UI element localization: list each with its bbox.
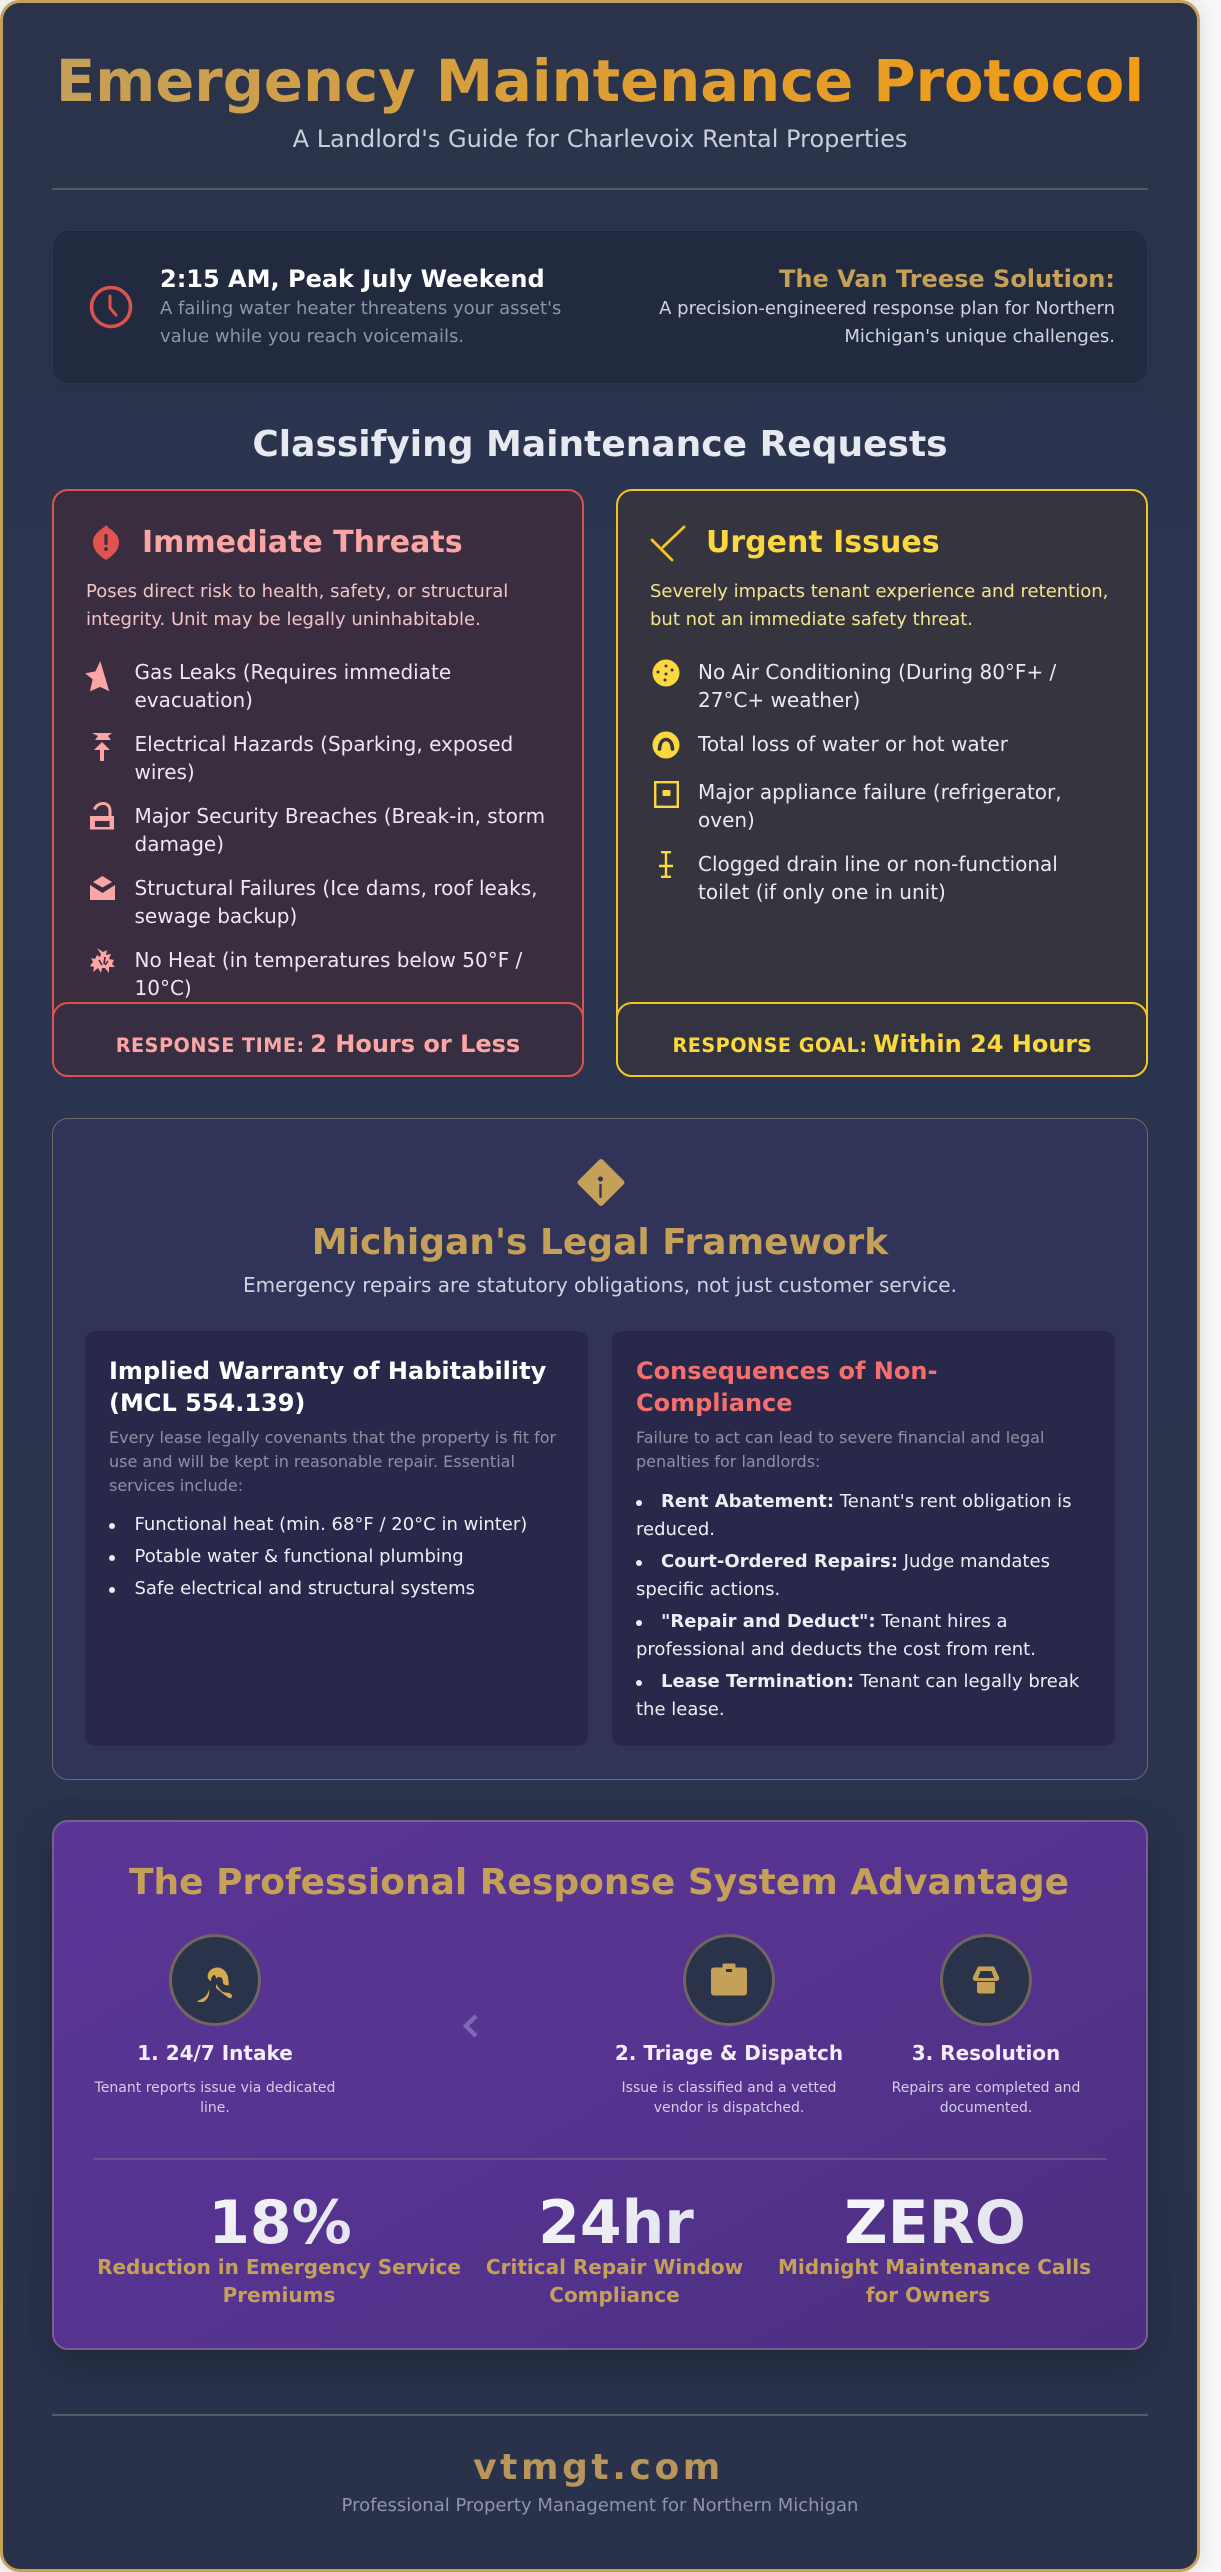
panel: scenario and solution banner — [52, 230, 1148, 384]
warranty description: services include: — [109, 1476, 243, 1495]
item: no heat: 10°C) — [134, 976, 192, 1000]
item: no air conditioning: 27°C+ weather) — [698, 688, 860, 712]
consequences description: Failure to act can lead to severe financial and legal — [636, 1428, 1044, 1447]
step description — [594, 2078, 864, 2118]
panel description — [86, 581, 508, 630]
item: electrical hazards: Electrical Hazards (Sparking, exposed — [134, 732, 513, 756]
warranty heading — [109, 1357, 546, 1417]
item: structural failures — [90, 876, 537, 928]
footer — [0, 2440, 1200, 2530]
stat label: for Owners — [866, 2283, 990, 2307]
step label: 1. 24/7 Intake — [137, 2041, 293, 2065]
list: consequences: Court-Ordered Repairs: Judge mandates — [661, 1551, 1050, 1572]
item: appliance failure: oven) — [698, 808, 755, 832]
panel: consequences — [612, 1331, 1115, 1746]
item: clogged drain: Clogged drain line or non-functional — [698, 852, 1058, 876]
icon: drain — [659, 851, 673, 878]
response time bar: immediate — [52, 1002, 584, 1077]
scenario description — [160, 298, 561, 347]
icon: info diamond — [578, 1159, 624, 1206]
panel: implied warranty — [85, 1331, 588, 1746]
solution description — [659, 298, 1115, 347]
consequences description: penalties for landlords: — [636, 1452, 820, 1471]
panel: urgent issues — [616, 489, 1148, 1077]
response goal bar: urgent — [616, 1002, 1148, 1077]
icon: dotted circle — [652, 660, 680, 686]
step label: 2. Triage & Dispatch — [615, 2041, 843, 2065]
item: no heat — [90, 948, 522, 1000]
icon: phone agent — [169, 1934, 261, 2026]
icon: flame star — [85, 661, 110, 692]
stat label: Compliance — [549, 2283, 680, 2307]
solution heading: The Van Treese Solution: — [779, 265, 1115, 293]
response time bar: immediate: RESPONSE TIME: 2 Hours or Less — [116, 1030, 520, 1058]
arrow: between steps — [462, 2014, 479, 2038]
item: clogged drain: toilet (if only one in unit) — [698, 880, 946, 904]
list: essential services: Potable water & functional plumbing — [134, 1546, 464, 1567]
stat number: 18% — [208, 2188, 352, 2258]
solution description: Michigan's unique challenges. — [844, 326, 1115, 347]
stat label: Premiums — [223, 2283, 335, 2307]
step description: Tenant reports issue via dedicated — [95, 2080, 335, 2096]
list: consequences: reduced. — [636, 1519, 715, 1540]
scenario text — [160, 265, 561, 347]
item: no air conditioning — [652, 660, 1056, 712]
list: essential services: Functional heat (min. 68°F / 20°C in winter) — [134, 1514, 527, 1535]
stat number: 24hr — [538, 2188, 694, 2258]
scenario heading: 2:15 AM, Peak July Weekend — [160, 265, 545, 293]
legal subheading: Emergency repairs are statutory obligations, not just customer service. — [243, 1273, 957, 1297]
header — [52, 48, 1148, 190]
warranty heading: Implied Warranty of Habitability — [109, 1357, 546, 1385]
item: no heat: No Heat (in temperatures below 50°F / — [134, 948, 522, 972]
step description: Issue is classified and a vetted — [622, 2080, 836, 2096]
item: gas leaks: evacuation) — [134, 688, 253, 712]
consequences heading: Compliance — [636, 1389, 793, 1417]
response goal bar: urgent: RESPONSE GOAL: Within 24 Hours — [672, 1030, 1092, 1058]
icon: water arch — [652, 732, 680, 758]
step description: documented. — [940, 2100, 1032, 2116]
step description — [851, 2078, 1121, 2118]
item: security breaches: damage) — [134, 832, 224, 856]
consequences description — [636, 1426, 1044, 1474]
item: gas leaks — [85, 660, 451, 712]
consequences heading: Consequences of Non- — [636, 1357, 937, 1385]
panel heading: Urgent Issues — [706, 524, 940, 560]
stat label: Reduction in Emergency Service — [97, 2255, 461, 2279]
scenario description: A failing water heater threatens your asset's — [160, 298, 561, 319]
item: no air conditioning: No Air Conditioning (During 80°F+ / — [698, 660, 1056, 684]
stat: premium reduction — [80, 2185, 480, 2315]
list: consequences — [636, 1488, 1096, 1728]
item: security breaches: Major Security Breaches (Break-in, storm — [134, 804, 545, 828]
item: loss of water: Total loss of water or hot water — [698, 732, 1008, 756]
panel description: Poses direct risk to health, safety, or structural — [86, 581, 508, 602]
step 2: triage — [594, 1934, 864, 2124]
stat number — [465, 2188, 767, 2258]
item: structural failures: sewage backup) — [134, 904, 297, 928]
panel description — [650, 581, 1108, 630]
list: consequences: Rent Abatement: Tenant's rent obligation is — [661, 1491, 1072, 1512]
panel description: integrity. Unit may be legally uninhabitable. — [86, 609, 481, 630]
stat number: ZERO — [844, 2188, 1026, 2258]
icon: clock — [90, 286, 132, 328]
list: threats — [85, 660, 545, 1000]
list: urgent issues — [652, 660, 1062, 904]
step description: vendor is dispatched. — [654, 2100, 804, 2116]
item: appliance failure — [654, 780, 1062, 832]
warranty heading: (MCL 554.139) — [109, 1389, 305, 1417]
item: clogged drain — [659, 851, 1058, 904]
item: appliance failure: Major appliance failure (refrigerator, — [698, 780, 1062, 804]
warranty description: Every lease legally covenants that the property is fit for — [109, 1428, 556, 1447]
section heading: classifying requests: Classifying Maintenance Requests — [252, 424, 948, 465]
step description — [80, 2078, 350, 2118]
icon: open lock — [90, 802, 114, 830]
stat: repair window — [465, 2185, 765, 2315]
stat label — [465, 2253, 764, 2309]
icon: tool — [940, 1934, 1032, 2026]
panel: legal framework — [52, 1118, 1148, 1780]
warranty description: use and will be kept in reasonable repair. Essential — [109, 1452, 515, 1471]
icon: layers — [90, 876, 115, 900]
item: electrical hazards: wires) — [134, 760, 195, 784]
list: consequences: Lease Termination: Tenant can legally break — [661, 1671, 1079, 1692]
panel: immediate threats — [52, 489, 584, 1077]
stat: midnight calls — [778, 2185, 1085, 2315]
stat label — [778, 2253, 1078, 2309]
step label: 3. Resolution — [912, 2041, 1060, 2065]
panel heading: Immediate Threats — [142, 524, 463, 560]
list: consequences: the lease. — [636, 1699, 725, 1720]
step 3: resolution — [851, 1934, 1121, 2124]
stat number — [785, 2188, 1085, 2258]
consequences heading — [636, 1355, 937, 1419]
list: consequences: "Repair and Deduct": Tenant hires a — [661, 1611, 1008, 1632]
advantage heading: The Professional Response System Advantage — [129, 1862, 1069, 1903]
icon: alert drop — [93, 525, 119, 560]
item: electrical hazards — [92, 732, 513, 784]
list: consequences: specific actions. — [636, 1579, 780, 1600]
footer tagline: Professional Property Management for Northern Michigan — [342, 2495, 858, 2516]
list: consequences: professional and deducts the cost from rent. — [636, 1639, 1036, 1660]
panel description: but not an immediate safety threat. — [650, 609, 973, 630]
step 1: intake — [80, 1934, 350, 2124]
icon: briefcase — [683, 1934, 775, 2026]
step description: line. — [200, 2100, 230, 2116]
list: essential services: Safe electrical and structural systems — [134, 1578, 475, 1599]
panel description: Severely impacts tenant experience and retention, — [650, 581, 1108, 602]
icon: electrical — [92, 733, 112, 761]
footer url: vtmgt.com — [473, 2447, 724, 2488]
item: security breaches — [90, 802, 545, 856]
title: Emergency Maintenance Protocol — [56, 48, 1144, 115]
stat number — [80, 2188, 480, 2258]
item: structural failures: Structural Failures (Ice dams, roof leaks, — [134, 876, 537, 900]
stat label — [80, 2253, 478, 2309]
stat label: Midnight Maintenance Calls — [778, 2255, 1091, 2279]
icon: square appliance — [654, 781, 679, 808]
list: essential services — [109, 1511, 549, 1611]
icon: check lines — [650, 526, 686, 562]
stat label: Critical Repair Window — [486, 2255, 743, 2279]
subtitle: A Landlord's Guide for Charlevoix Rental Properties — [293, 125, 907, 153]
legal heading: Michigan's Legal Framework — [312, 1222, 888, 1263]
item: gas leaks: Gas Leaks (Requires immediate — [134, 660, 451, 684]
solution description: A precision-engineered response plan for Northern — [659, 298, 1115, 319]
warranty description — [109, 1426, 556, 1499]
scenario description: value while you reach voicemails. — [160, 326, 464, 347]
step description: Repairs are completed and — [892, 2080, 1080, 2096]
solution text — [659, 265, 1115, 347]
panel: professional response system — [52, 1820, 1148, 2350]
icon: frost — [90, 948, 115, 973]
